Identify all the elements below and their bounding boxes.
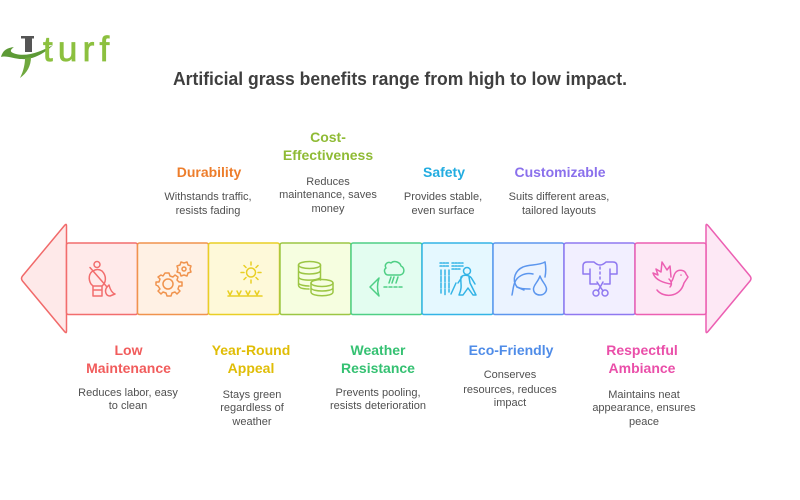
label: safety: Provides stable, bbox=[404, 191, 482, 203]
icon: coin stacks bbox=[298, 262, 333, 296]
icon: person walking with grid bbox=[440, 263, 476, 295]
label: weather resistance bbox=[330, 342, 426, 412]
segment: cost-effectiveness bbox=[280, 243, 351, 314]
segment: customizable bbox=[564, 243, 635, 314]
label: cost-effectiveness: maintenance, saves bbox=[279, 189, 377, 201]
label: weather resistance: Prevents pooling, bbox=[336, 387, 420, 399]
label: respectful ambiance: appearance, ensures bbox=[592, 402, 696, 414]
label: respectful ambiance: Ambiance bbox=[609, 360, 676, 376]
logo: Jturf: turf bbox=[43, 30, 114, 69]
icon: rain cloud bbox=[370, 262, 404, 296]
label: durability bbox=[164, 164, 252, 217]
label: eco-friendly: resources, reduces bbox=[463, 384, 557, 396]
logo: Jturf bbox=[1, 30, 114, 78]
icon: shirt and scissors bbox=[583, 262, 617, 296]
label: low maintenance: Maintenance bbox=[86, 360, 171, 376]
label: durability: Durability bbox=[177, 164, 241, 180]
label: respectful ambiance: peace bbox=[629, 416, 659, 428]
label: year-round appeal: regardless of bbox=[220, 402, 285, 414]
label: safety bbox=[404, 164, 482, 217]
segment: durability bbox=[138, 243, 208, 314]
segment: low maintenance bbox=[66, 243, 138, 314]
label: low maintenance: Low bbox=[114, 342, 143, 358]
label: year-round appeal bbox=[212, 342, 290, 428]
label: low maintenance bbox=[78, 342, 178, 412]
label: cost-effectiveness: Effectiveness bbox=[283, 147, 373, 163]
segment: eco-friendly bbox=[493, 243, 564, 314]
label: year-round appeal: Stays green bbox=[223, 389, 281, 401]
label: cost-effectiveness: Reduces bbox=[306, 176, 350, 188]
icon: gears bbox=[156, 262, 191, 296]
icon: leaf and water drop bbox=[512, 262, 546, 295]
label: year-round appeal: Year-Round bbox=[212, 342, 290, 358]
label: respectful ambiance: Maintains neat bbox=[608, 389, 680, 401]
label: safety: Safety bbox=[423, 164, 465, 180]
label: year-round appeal: weather bbox=[231, 416, 272, 428]
arrow head: right bbox=[706, 224, 751, 333]
icon: person sweeping bbox=[89, 262, 115, 296]
label: eco-friendly bbox=[463, 342, 557, 409]
label: low maintenance: Reduces labor, easy bbox=[78, 387, 178, 399]
label: cost-effectiveness: Cost- bbox=[310, 129, 346, 145]
label: weather resistance: Resistance bbox=[341, 360, 415, 376]
label: eco-friendly: Conserves bbox=[484, 369, 537, 381]
segment: respectful ambiance bbox=[635, 243, 706, 314]
label: year-round appeal: Appeal bbox=[228, 360, 274, 376]
label: cost-effectiveness bbox=[279, 129, 377, 215]
segment: year-round appeal bbox=[208, 243, 280, 314]
label: eco-friendly: Eco-Friendly bbox=[469, 342, 554, 358]
label: cost-effectiveness: money bbox=[311, 203, 345, 215]
segment: safety bbox=[422, 243, 493, 314]
icon: dove bbox=[653, 262, 688, 295]
label: customizable bbox=[509, 164, 609, 217]
label: customizable: Customizable bbox=[514, 164, 606, 180]
label: weather resistance: Weather bbox=[351, 342, 406, 358]
icon: sun over grass bbox=[228, 262, 262, 296]
arrow head: left bbox=[22, 224, 66, 333]
label: respectful ambiance bbox=[592, 342, 696, 428]
label: eco-friendly: impact bbox=[494, 397, 526, 409]
label: durability: Withstands traffic, bbox=[164, 191, 252, 203]
label: durability: resists fading bbox=[176, 205, 240, 217]
label: customizable: tailored layouts bbox=[522, 205, 596, 217]
label: customizable: Suits different areas, bbox=[509, 191, 609, 203]
title: Artificial grass benefits range from high to low impact. bbox=[173, 69, 627, 89]
label: respectful ambiance: Respectful bbox=[606, 342, 678, 358]
label: safety: even surface bbox=[412, 205, 474, 217]
label: low maintenance: to clean bbox=[109, 400, 147, 412]
segment: weather resistance bbox=[351, 243, 422, 314]
label: weather resistance: resists deterioration bbox=[330, 400, 426, 412]
